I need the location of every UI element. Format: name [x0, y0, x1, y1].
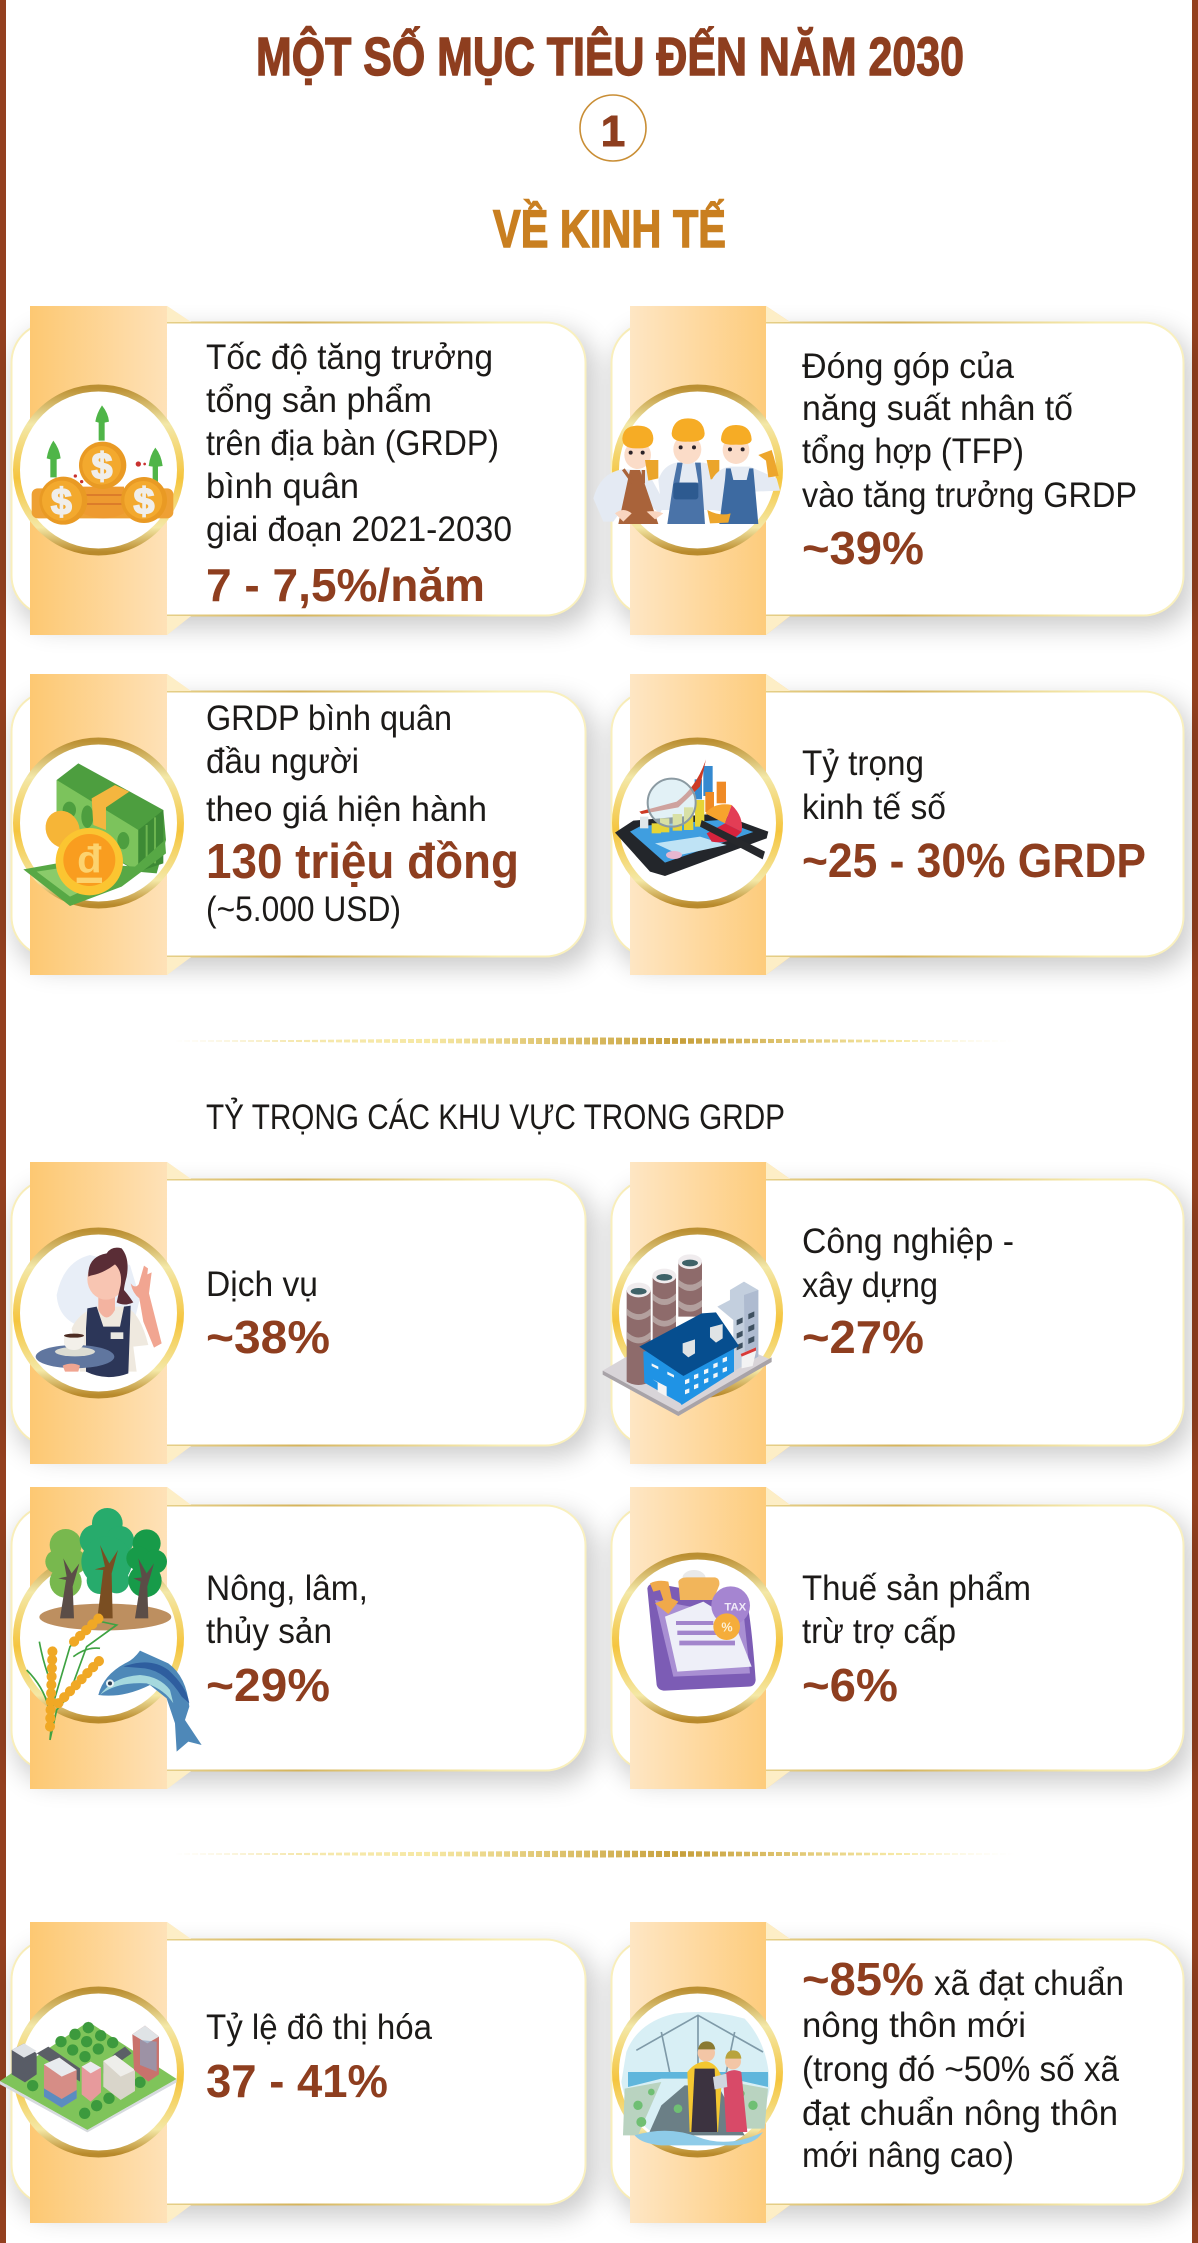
icon: coins and arrows: $ [92, 445, 113, 487]
icon: coins and arrows: $ [134, 479, 155, 521]
icon: banknotes and dong coin: đ [77, 838, 102, 882]
card body [12, 1940, 586, 2204]
card shadow [14, 330, 596, 628]
band folds [167, 1922, 191, 2223]
card shadow [614, 330, 1192, 628]
icon ring [16, 1990, 180, 2154]
icon: coins and arrows [32, 405, 173, 525]
icon ring [616, 1556, 780, 1720]
card text: 7 - 7,5%/năm [206, 559, 485, 611]
card text: (~5.000 USD) [206, 890, 401, 929]
icon ring [616, 1990, 780, 2154]
icon ring [16, 741, 180, 905]
card text: Đóng góp của [802, 347, 1015, 386]
band folds [167, 306, 191, 635]
card text: GRDP bình quân [206, 699, 452, 738]
card text: kinh tế số [802, 788, 946, 827]
band folds [167, 674, 191, 975]
left border [0, 0, 6, 2243]
gold band [630, 1922, 790, 2223]
card text: ~39% [802, 522, 924, 574]
card text: xây dựng [802, 1266, 938, 1305]
card text [206, 338, 512, 611]
icon: isometric city [0, 2022, 177, 2132]
panel: industry and construction [603, 1162, 1192, 1464]
band folds [167, 1487, 191, 1789]
panel: TFP contribution [593, 306, 1192, 635]
card text [802, 1953, 1124, 2175]
panel: GRDP growth [12, 306, 596, 635]
icon: waitress with coffee [36, 1248, 162, 1377]
icon: tax clipboard: TAX [724, 1602, 747, 1614]
right border [1192, 0, 1198, 2243]
card body [12, 692, 586, 956]
card text: ~25 - 30% GRDP [802, 835, 1146, 888]
card text: Công nghiệp - [802, 1222, 1014, 1261]
band folds [766, 306, 790, 635]
card text: thủy sản [206, 1612, 332, 1651]
card text [206, 2008, 433, 2107]
icon ring [16, 1231, 180, 1395]
card text: ~27% [802, 1311, 924, 1363]
card text: đầu người [206, 742, 359, 781]
card text [802, 1569, 1031, 1711]
icon: factory and chimneys [603, 1254, 772, 1416]
card text: mới nâng cao) [802, 2136, 1014, 2175]
card shadow [14, 1513, 596, 1783]
gold band [30, 1487, 191, 1789]
card text: Dịch vụ [206, 1265, 318, 1304]
card text [206, 1569, 368, 1711]
card text: Tỷ lệ đô thị hóa [206, 2008, 433, 2047]
gold band [30, 1922, 191, 2223]
section heading: VỀ KINH TẾ [493, 199, 726, 259]
gold band [630, 1487, 790, 1789]
band folds [766, 1922, 790, 2223]
card body [12, 1506, 586, 1770]
card text: xã đạt chuẩn [934, 1964, 1124, 2003]
icon ring [16, 1556, 180, 1720]
section number badge [580, 95, 646, 161]
card text [802, 1222, 1014, 1363]
icon ring [16, 388, 180, 552]
card text: tổng hợp (TFP) [802, 432, 1024, 471]
section number badge: 1 [601, 107, 625, 156]
card text: Thuế sản phẩm [802, 1569, 1031, 1608]
card text: bình quân [206, 467, 359, 506]
card text: (trong đó ~50% số xã [802, 2050, 1120, 2089]
card text: ~85% [802, 1953, 924, 2005]
card shadow [614, 1187, 1192, 1457]
card text: đạt chuẩn nông thôn [802, 2094, 1118, 2133]
divider [174, 1849, 1020, 1859]
card text [802, 347, 1137, 574]
card text: nông thôn mới [802, 2006, 1026, 2045]
panel: product taxes [612, 1487, 1192, 1789]
panel: urbanization [0, 1922, 596, 2223]
band folds [766, 1487, 790, 1789]
title: MỘT SỐ MỤC TIÊU ĐẾN NĂM 2030 [256, 26, 964, 87]
card shadow [14, 699, 596, 969]
card text: ~29% [206, 1659, 330, 1711]
card text [802, 744, 1146, 888]
panel: services [12, 1162, 596, 1464]
gold band [630, 674, 790, 975]
band folds [766, 674, 790, 975]
divider [174, 1036, 1020, 1046]
card shadow [14, 1947, 596, 2217]
card shadow [614, 699, 1192, 969]
card body [612, 1506, 1184, 1770]
gold band [30, 674, 191, 975]
card body [12, 322, 586, 616]
card body [12, 1180, 586, 1446]
icon: tablet analytics [615, 759, 768, 876]
card body [612, 692, 1184, 956]
icon: coins and arrows: $ [51, 480, 72, 522]
card text: 130 triệu đồng [206, 835, 519, 889]
card text: Tỷ trọng [802, 744, 924, 783]
panel: agriculture, forestry, fishery [12, 1487, 596, 1789]
card body [612, 1180, 1184, 1446]
gold band [30, 1162, 191, 1464]
card shadow [614, 1947, 1192, 2217]
sub-heading: TỶ TRỌNG CÁC KHU VỰC TRONG GRDP [206, 1097, 785, 1137]
icon: tax clipboard [647, 1570, 756, 1691]
icon: three workers [593, 418, 780, 524]
panel: digital economy [612, 674, 1192, 975]
icon: trees, rice and fish [27, 1508, 202, 1752]
card text: giai đoạn 2021-2030 [206, 510, 512, 549]
card body [612, 1940, 1184, 2204]
gold band [630, 306, 790, 635]
panel: GRDP per capita [12, 674, 596, 975]
icon ring [616, 741, 780, 905]
card text [206, 699, 519, 929]
card text: Nông, lâm, [206, 1569, 368, 1608]
card text: ~6% [802, 1659, 898, 1711]
card text: năng suất nhân tố [802, 389, 1073, 428]
card text: tổng sản phẩm [206, 381, 432, 420]
card text [206, 1265, 330, 1363]
gold band [30, 306, 191, 635]
panel: new rural communes [612, 1922, 1192, 2223]
card shadow [14, 1187, 596, 1457]
card body [612, 322, 1184, 616]
card text: Tốc độ tăng trưởng [206, 338, 493, 377]
icon: banknotes and dong coin [23, 763, 166, 906]
band folds [167, 1162, 191, 1464]
band folds [766, 1162, 790, 1464]
icon ring [616, 388, 780, 552]
card text: vào tăng trưởng GRDP [802, 476, 1137, 515]
card text: trừ trợ cấp [802, 1612, 956, 1651]
icon: tax clipboard: % [721, 1620, 733, 1634]
card text: theo giá hiện hành [206, 790, 487, 829]
gold band [630, 1162, 790, 1464]
card text: ~38% [206, 1311, 330, 1363]
card shadow [614, 1513, 1192, 1783]
icon: farmers in a greenhouse [621, 2012, 770, 2145]
icon ring [616, 1231, 780, 1395]
card text: trên địa bàn (GRDP) [206, 424, 499, 463]
card text: 37 - 41% [206, 2055, 388, 2107]
